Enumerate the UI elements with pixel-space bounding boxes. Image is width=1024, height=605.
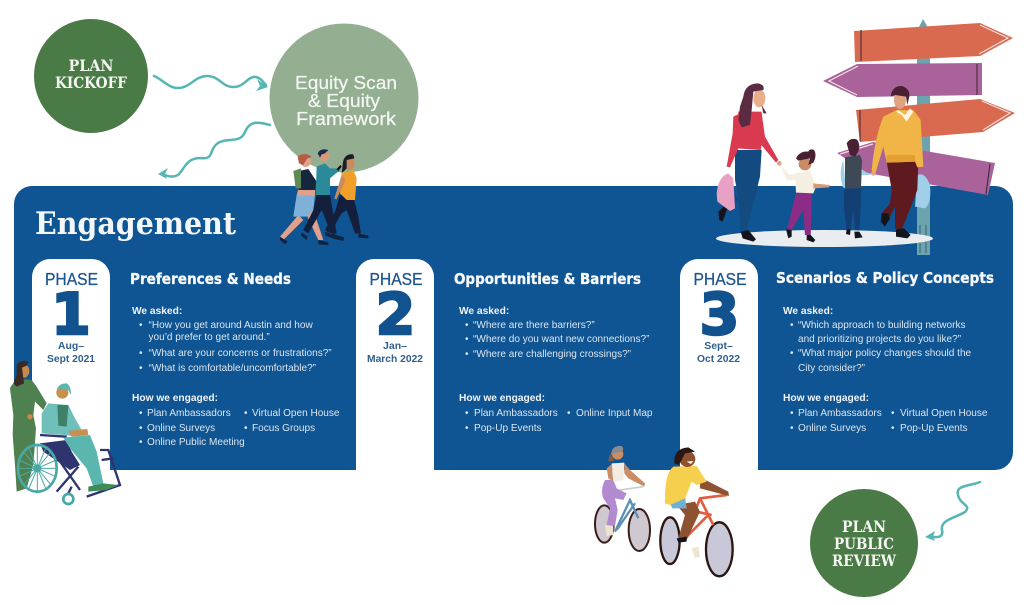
phase 3 we asked: • (790, 320, 794, 331)
cyclist 1 (595, 446, 650, 551)
phase 2 we asked (459, 306, 649, 360)
patient (42, 383, 118, 492)
circle: equity scan and equity framework: & Equity (308, 90, 381, 111)
phase 1 we asked: • (139, 348, 143, 359)
circle: plan public review: PUBLIC (834, 534, 894, 553)
arrow: engagement to public review (925, 482, 980, 541)
illustration: signpost (823, 19, 1015, 255)
illustration: woman pushing wheelchair (10, 361, 120, 504)
phase 2 we asked: • (465, 320, 469, 331)
sign: lower orange (856, 99, 1015, 142)
phase 1 tab: 1 (51, 282, 91, 348)
phase 1 how we engaged: Focus Groups (252, 423, 315, 434)
phase 1 we asked: “What is comfortable/uncomfortable?” (148, 363, 316, 374)
phase 3 title: Scenarios & Policy Concepts (776, 269, 994, 287)
phase 3 tab: Oct 2022 (697, 353, 740, 365)
phase 1 tab: Sept 2021 (47, 353, 95, 365)
phase 2 how we engaged: Plan Ambassadors (474, 408, 558, 419)
circle: plan public review: PLAN (842, 517, 886, 536)
phase 1 how we engaged: • (139, 437, 143, 448)
phase 2 we asked: “Where do you want new connections?” (473, 334, 649, 345)
phase 2 how we engaged: Online Input Map (576, 408, 653, 419)
phase 1 how we engaged (132, 393, 340, 448)
phase 3 how we engaged: • (891, 423, 895, 434)
phase 2 tab: Jan– (383, 340, 407, 352)
mother (717, 83, 782, 242)
circle: plan public review (810, 489, 918, 597)
phase 3 how we engaged: • (790, 408, 794, 419)
phase 1 how we engaged: Virtual Open House (252, 408, 340, 419)
phase 1 content (130, 270, 340, 448)
phase 1 tab: PHASE (45, 269, 98, 289)
caregiver (10, 361, 47, 492)
phase 1 we asked: We asked: (132, 306, 182, 317)
phase 2 how we engaged: • (567, 408, 571, 419)
phase 3 we asked: • (790, 348, 794, 359)
walker 2 (301, 149, 344, 241)
phase 3 how we engaged: How we engaged: (783, 393, 869, 404)
cyclist 2 (660, 447, 733, 576)
phase 3 how we engaged: Virtual Open House (900, 408, 988, 419)
phase 2 content (454, 270, 653, 434)
illustration: two cyclists (595, 446, 733, 576)
phase 2 how we engaged: How we engaged: (459, 393, 545, 404)
panel: engagement (14, 186, 1013, 470)
circle: plan kickoff (34, 19, 148, 133)
phase 2 we asked: • (465, 349, 469, 360)
girl (781, 149, 830, 242)
boy (841, 139, 872, 238)
phase 2 we asked: We asked: (459, 306, 509, 317)
phase 3 tab: PHASE (694, 269, 746, 289)
phase 1 how we engaged: Plan Ambassadors (147, 408, 231, 419)
circle: equity scan and equity framework (270, 24, 418, 172)
phase 1 we asked: you’d prefer to get around.” (148, 332, 270, 343)
phase 2 tab: March 2022 (367, 353, 423, 365)
phase 3 content (776, 269, 994, 434)
phase 3 we asked: “What major policy changes should the (798, 348, 972, 359)
phase 1 how we engaged: Online Public Meeting (147, 437, 245, 448)
phase 2 tab: 2 (376, 282, 415, 348)
phase 3 we asked (783, 306, 972, 374)
phase 3 how we engaged: Online Surveys (798, 423, 866, 434)
phase 2 how we engaged: • (465, 423, 469, 434)
phase 2 how we engaged: • (465, 408, 469, 419)
phase 1 we asked (132, 306, 332, 374)
phase 2 title: Opportunities & Barriers (454, 270, 641, 288)
phase 1 how we engaged: • (139, 423, 143, 434)
phase 2 we asked: “Where are there barriers?” (473, 320, 595, 331)
circle: plan public review: REVIEW (832, 551, 897, 570)
ground ellipse (716, 230, 933, 247)
illustration: three walkers (280, 149, 368, 245)
arrow: equity scan to engagement (158, 123, 270, 179)
circle: plan kickoff: KICKOFF (55, 73, 127, 92)
phase 2 we asked: “Where are challenging crossings?” (473, 349, 631, 360)
phase 3 tab (680, 259, 758, 470)
phase 3 how we engaged: • (891, 408, 895, 419)
father (871, 86, 930, 238)
phase 3 tab: Sept– (704, 340, 733, 352)
phase 2 tab (356, 259, 434, 470)
phase 1 we asked: • (139, 320, 143, 331)
phase 3 we asked: City consider?” (798, 363, 865, 374)
phase 1 how we engaged: • (139, 408, 143, 419)
phase 3 we asked: We asked: (783, 306, 833, 317)
phase 1 title: Preferences & Needs (130, 270, 291, 288)
wheelchair (18, 435, 120, 504)
phase 2 tab: PHASE (370, 269, 422, 289)
arrow: kickoff to equity scan (154, 76, 268, 91)
phase 1 how we engaged: • (244, 423, 248, 434)
post (917, 19, 930, 255)
phase 3 how we engaged: Plan Ambassadors (798, 408, 882, 419)
phase 1 how we engaged: Online Surveys (147, 423, 215, 434)
phase 1 how we engaged: • (244, 408, 248, 419)
heading: engagement: Engagement (35, 206, 237, 242)
phase 1 we asked: “What are your concerns or frustrations?” (148, 348, 332, 359)
phase 1 we asked: • (139, 363, 143, 374)
phase 2 how we engaged (459, 393, 653, 434)
phase 3 how we engaged: Pop-Up Events (900, 423, 968, 434)
phase 1 tab (32, 259, 110, 470)
phase 2 we asked: • (465, 334, 469, 345)
phase 1 we asked: “How you get around Austin and how (148, 320, 313, 331)
circle: equity scan and equity framework: Equity Scan (295, 72, 397, 93)
sign: upper purple (823, 63, 982, 97)
walker 1 (280, 154, 328, 245)
circle: equity scan and equity framework: Framework (296, 108, 397, 129)
phase 3 how we engaged: • (790, 423, 794, 434)
sign: bottom purple (837, 142, 995, 195)
walker 3 (325, 154, 368, 238)
phase 3 tab: 3 (700, 282, 739, 348)
illustration: family walking (716, 83, 933, 247)
circle: plan kickoff: PLAN (68, 56, 114, 75)
sign: top orange (854, 23, 1013, 62)
phase 1 how we engaged: How we engaged: (132, 393, 218, 404)
phase 2 how we engaged: Pop-Up Events (474, 423, 542, 434)
phase 3 we asked: “Which approach to building networks (798, 320, 966, 331)
phase 3 we asked: and prioritizing projects do you like?” (798, 334, 961, 345)
phase 3 how we engaged (783, 393, 988, 434)
phase 1 tab: Aug– (58, 340, 84, 352)
